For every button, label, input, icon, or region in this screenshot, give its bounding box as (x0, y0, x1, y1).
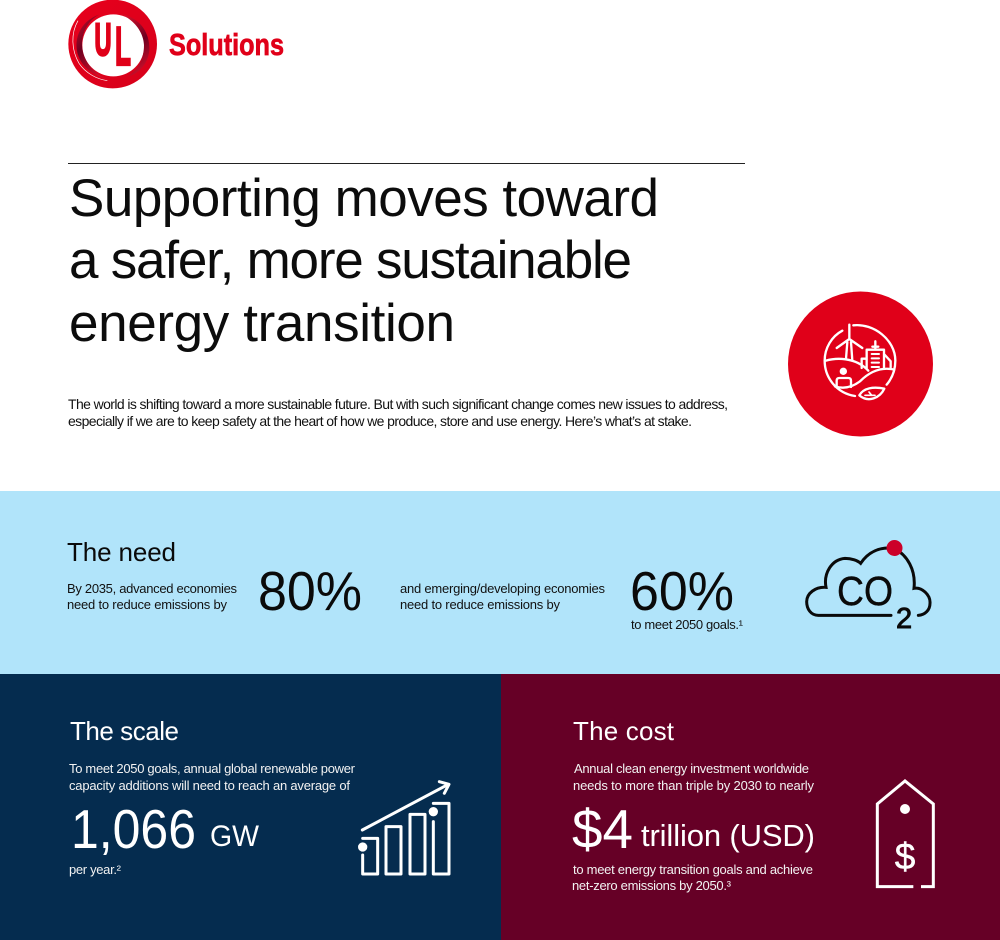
logo wordmark: Solutions (169, 27, 284, 62)
title: Supporting moves toward (69, 169, 659, 228)
title (69, 169, 659, 353)
text: emerging economies (400, 581, 606, 612)
title: a safer, more sustainable (69, 231, 632, 290)
logo: UL Solutions (68, 0, 284, 88)
title: energy transition (69, 294, 455, 353)
text: to meet goals: to meet 2050 goals.¹ (631, 617, 744, 632)
logo mark: UL ring (68, 0, 157, 88)
logo mark: UL ring: L (115, 15, 131, 77)
text: cost description: needs to more than triple by 2030 to nearly (573, 778, 814, 793)
stat: 80%: 80% (258, 560, 362, 622)
text: scale description (69, 761, 356, 793)
text: cost conclusion: net-zero emissions by 2050.³ (572, 878, 732, 893)
heading: the need: The need (67, 537, 176, 567)
stat: $4 trillion (USD) (572, 798, 815, 860)
logo mark: UL ring: U (94, 14, 112, 65)
heading: the scale: The scale (70, 716, 179, 746)
text: cost conclusion (572, 862, 813, 893)
stat: 1,066 GW: GW (210, 820, 260, 853)
icon: CO2 cloud (807, 540, 930, 635)
text: cost description (573, 761, 814, 793)
title rule (68, 163, 745, 164)
stat: 60%: 60% (630, 560, 734, 622)
icon: price tag (877, 781, 933, 887)
icon: CO2 cloud: 2 (896, 603, 912, 635)
text: per year: per year.² (69, 862, 122, 877)
panel: the scale (0, 674, 501, 940)
intro paragraph: especially if we are to keep safety at the heart of how we produce, store and use energy. Here’s what’s at stake. (68, 413, 692, 429)
heading: the cost: The cost (573, 716, 675, 746)
text: cost conclusion: to meet energy transition goals and achieve (573, 862, 813, 877)
text: emerging economies: need to reduce emissions by (400, 597, 560, 612)
panel: the cost (501, 674, 1000, 940)
stat: 1,066 GW: 1,066 (71, 798, 196, 860)
stat: $4 trillion (USD): trillion (USD) (641, 818, 815, 853)
panel: the need (0, 491, 1000, 674)
text: emerging economies: and emerging/developing economies (400, 581, 606, 596)
text: cost description: Annual clean energy investment worldwide (574, 761, 809, 776)
icon: energy transition badge (788, 292, 933, 436)
text: advanced economies (67, 581, 238, 612)
icon: rising bar chart (358, 782, 449, 874)
icon: CO2 cloud: CO (837, 568, 893, 614)
icon: price tag: $ (895, 836, 915, 877)
text: scale description: capacity additions will need to reach an average of (69, 778, 350, 793)
text: advanced economies: By 2035, advanced economies (67, 581, 238, 596)
intro paragraph (68, 396, 728, 429)
intro paragraph: The world is shifting toward a more sustainable future. But with such significant change comes new issues to address, (68, 396, 728, 412)
text: advanced economies: need to reduce emissions by (67, 597, 228, 612)
stat: $4 trillion (USD): $4 (572, 798, 633, 860)
text: scale description: To meet 2050 goals, annual global renewable power (69, 761, 356, 776)
